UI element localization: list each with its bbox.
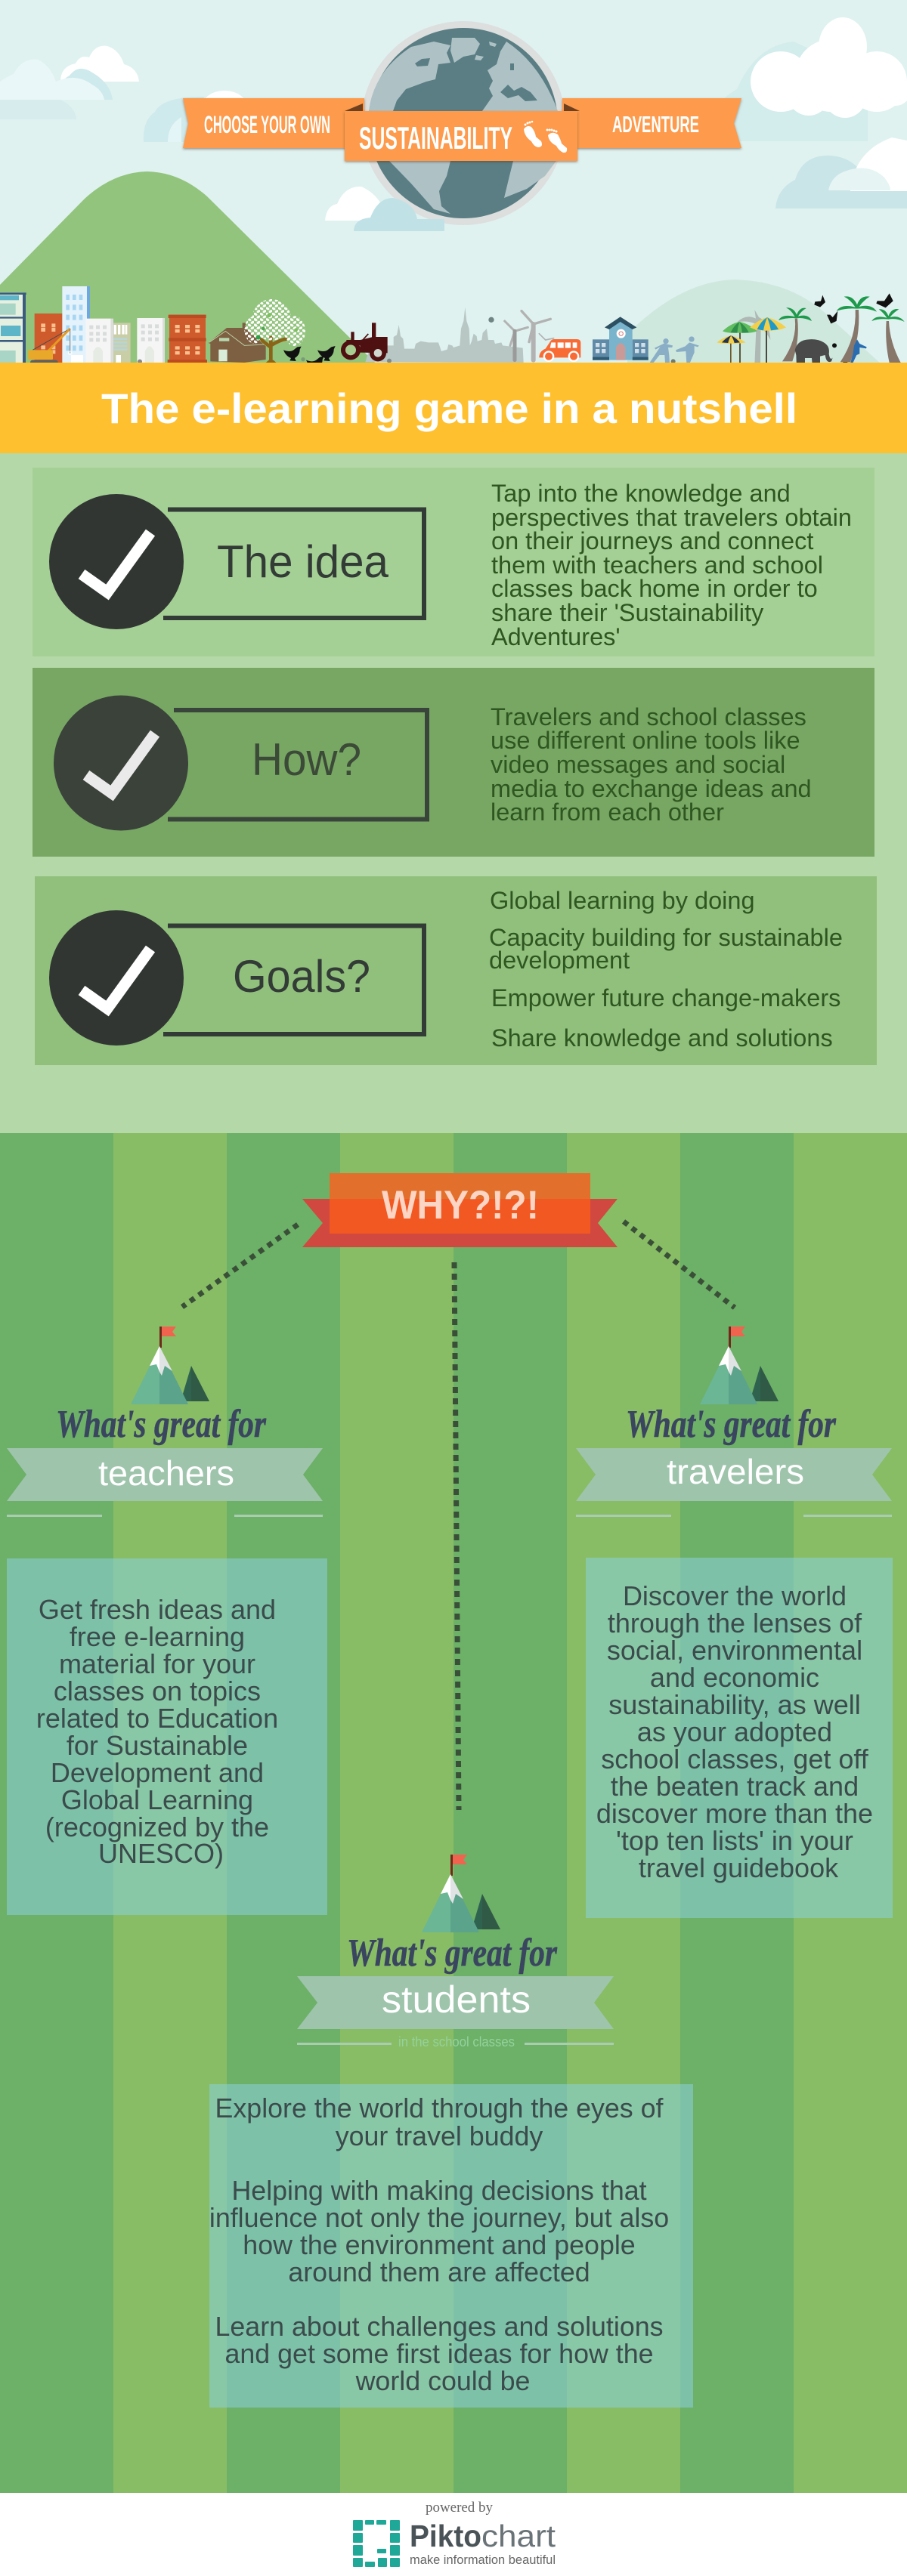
text: goals: Global learning by doing	[490, 887, 755, 914]
header scene: sky, globe, banner and skyline	[0, 0, 907, 371]
text box: travelers: sustainability, as well	[608, 1689, 861, 1720]
dotted connector: centre	[454, 1262, 459, 1810]
cloud behind banner left	[144, 91, 246, 142]
crane	[28, 329, 72, 365]
dotted connector: left	[182, 1225, 298, 1307]
text box: travelers: 'top ten lists' in your	[616, 1825, 853, 1856]
text box: teachers	[7, 1558, 327, 1915]
title band	[0, 363, 907, 453]
text: the idea: them with teachers and school	[491, 551, 823, 579]
panel: goals	[35, 876, 877, 1065]
clouds: lower right	[775, 137, 907, 208]
ribbon: teachers	[7, 1448, 323, 1501]
text box: teachers: free e-learning	[70, 1621, 245, 1652]
label box: the idea	[163, 509, 424, 618]
text: how: learn from each other	[491, 798, 724, 826]
heading: why: WHY?!?!	[382, 1183, 539, 1228]
clouds: upper left	[0, 46, 139, 119]
grey palm silhouette	[737, 310, 770, 365]
banner text center: SUSTAINABILITY	[359, 120, 512, 156]
icon: check circle	[54, 695, 188, 831]
building: tall white and blue	[62, 286, 90, 363]
powered by: powered by	[426, 2500, 493, 2516]
building: orange left	[35, 314, 63, 363]
footer: piktochart	[0, 2493, 907, 2576]
beach umbrellas	[717, 317, 786, 366]
icon: mountain flag	[422, 1855, 500, 1932]
text box: students: and get some first ideas for how the	[224, 2339, 654, 2369]
text: how: use different online tools like	[491, 727, 800, 754]
football players	[650, 336, 699, 365]
wordmark: Pikto	[410, 2519, 481, 2553]
clouds: upper right	[708, 17, 907, 141]
banner text right: ADVENTURE	[612, 111, 699, 137]
icon: footprints	[524, 121, 567, 153]
text box: teachers: (recognized by the	[45, 1812, 269, 1842]
chicken	[283, 347, 302, 361]
text box: travelers: travel guidebook	[639, 1852, 839, 1883]
script heading: What's great for	[626, 1403, 837, 1446]
clouds: small centre	[325, 187, 444, 231]
text: goals: Empower future change-makers	[491, 984, 840, 1012]
elephant	[795, 339, 833, 368]
icon: mountain flag	[131, 1327, 209, 1404]
logo icon	[353, 2520, 400, 2567]
column: teachers	[7, 1327, 327, 1915]
bus	[539, 339, 580, 362]
text: how: video messages and social	[491, 751, 785, 778]
text: how: Travelers and school classes	[491, 703, 806, 730]
house	[209, 323, 266, 363]
text: the idea: classes back home in order to	[491, 575, 818, 602]
text: goals: Share knowledge and solutions	[491, 1024, 833, 1052]
text box: students: world could be	[355, 2366, 530, 2396]
ribbon: travelers	[576, 1448, 892, 1501]
building: white right	[137, 318, 165, 364]
hill: pale right hill	[627, 280, 881, 363]
banner: choose your own adventure	[183, 98, 741, 161]
text box: travelers: social, environmental	[607, 1635, 862, 1666]
butterflies, ball and blue figure	[814, 293, 893, 365]
text box: students	[209, 2084, 693, 2408]
palm trees	[779, 296, 905, 363]
text box: travelers: Discover the world	[623, 1580, 847, 1611]
building: orange right	[168, 315, 207, 363]
building: tan	[113, 323, 131, 364]
text: how: media to exchange ideas and	[491, 775, 812, 802]
text box: teachers: material for your	[59, 1648, 255, 1679]
icon: mountain flag	[700, 1327, 779, 1404]
text box: teachers: Development and	[51, 1757, 264, 1788]
panel: how	[33, 668, 874, 857]
text: the idea: Tap into the knowledge and	[491, 480, 791, 507]
icon: check circle	[49, 494, 184, 629]
text box: travelers: and economic	[650, 1662, 819, 1693]
text box: teachers: Get fresh ideas and	[39, 1594, 276, 1625]
text box: teachers: for Sustainable	[67, 1730, 248, 1761]
skyline: school, players, umbrellas, palms, elephant	[593, 293, 905, 368]
heading: the idea: The idea	[217, 536, 389, 587]
school	[593, 317, 649, 360]
text box: travelers: school classes, get off	[601, 1744, 869, 1774]
text box: teachers: related to Education	[36, 1703, 278, 1734]
text box: students: your travel buddy	[336, 2121, 543, 2151]
text box: students: around them are affected	[288, 2257, 590, 2287]
text: goals: Capacity building for sustainable	[489, 924, 843, 951]
section: nutshell panels	[0, 453, 907, 1133]
section: why background stripes	[0, 1133, 907, 2493]
banner text left: CHOOSE YOUR OWN	[204, 111, 330, 138]
hill: large green mountain	[0, 171, 376, 363]
text box: teachers: classes on topics	[54, 1676, 261, 1707]
text box: travelers: the beaten track and	[611, 1771, 859, 1802]
dotted connector: right	[624, 1222, 735, 1308]
building: white middle	[85, 319, 113, 365]
ribbon: why	[302, 1173, 618, 1247]
label box: goals	[163, 926, 424, 1034]
tagline: make information beautiful	[410, 2553, 556, 2567]
text box: travelers: through the lenses of	[608, 1608, 862, 1639]
ribbon: students: students	[382, 1978, 531, 2021]
heading: how: How?	[252, 734, 361, 785]
text box: travelers: discover more than the	[596, 1798, 873, 1829]
ribbon: students	[297, 1976, 614, 2029]
panel: the idea	[33, 468, 874, 656]
wordmark: chart	[481, 2519, 556, 2553]
caption: in the school classes: in the school classes	[398, 2034, 515, 2049]
script heading: What's great for	[56, 1403, 267, 1446]
text: the idea: share their 'Sustainability	[491, 599, 764, 626]
text box: travelers: as your adopted	[637, 1716, 832, 1747]
title: The e-learning game in a nutshell	[101, 385, 797, 432]
text box: students: Learn about challenges and solutions	[215, 2312, 664, 2342]
script heading: What's great for	[347, 1932, 558, 1975]
column: students	[209, 1855, 693, 2408]
city silhouette	[365, 307, 524, 363]
text: the idea: Adventures'	[491, 623, 621, 650]
tractor	[301, 323, 392, 363]
text box: students: Helping with making decisions that	[231, 2176, 647, 2206]
icon: check circle	[49, 910, 184, 1046]
tree	[244, 299, 305, 364]
text: the idea: perspectives that travelers obtain	[491, 504, 852, 531]
ribbon: travelers: travelers	[667, 1452, 804, 1491]
text box: teachers: UNESCO)	[98, 1838, 224, 1869]
globe	[361, 21, 565, 225]
text box: students: Explore the world through the eyes of	[215, 2093, 664, 2124]
text box: teachers: Global Learning	[61, 1784, 253, 1815]
column: travelers	[576, 1327, 893, 1918]
label box: how	[168, 710, 427, 819]
skyline: chickens, tractor, city, turbines, bus	[301, 307, 580, 371]
building: teal offices	[0, 292, 26, 365]
text: goals: development	[489, 947, 630, 974]
heading: goals: Goals?	[233, 951, 370, 1002]
chickens	[306, 346, 336, 371]
text box: travelers	[586, 1558, 893, 1918]
ribbon: teachers: teachers	[98, 1453, 234, 1493]
text: the idea: on their journeys and connect	[491, 527, 813, 554]
text box: students: influence not only the journey, but also	[209, 2203, 669, 2233]
wind turbines	[505, 311, 554, 360]
skyline: buildings and crane	[0, 286, 305, 365]
text box: students: how the environment and people	[243, 2230, 636, 2260]
